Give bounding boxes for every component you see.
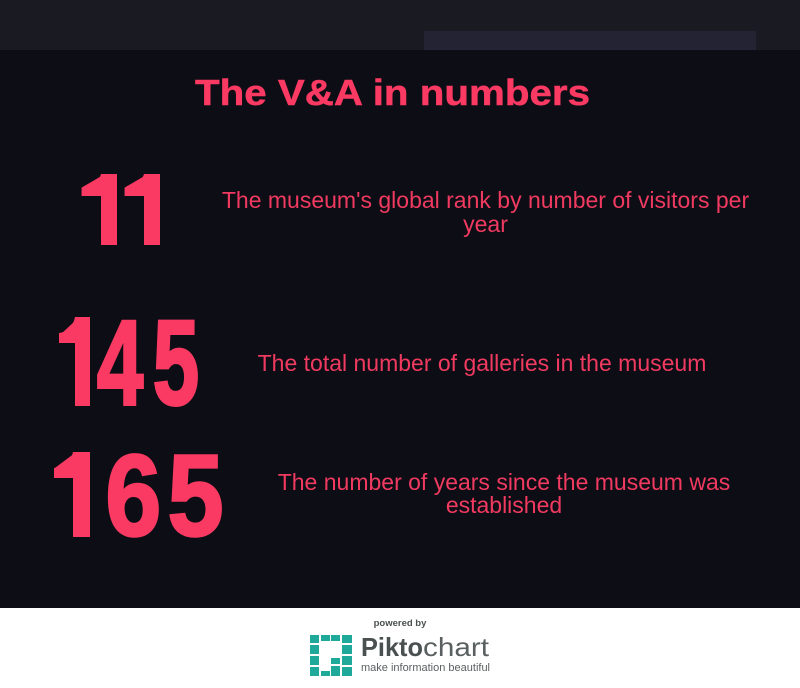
icon: Piktochart logo (310, 635, 352, 676)
logo tagline: make information beautiful (361, 662, 490, 674)
stat: years (44, 432, 730, 561)
stat: galleries (50, 296, 706, 431)
stat: global rank (70, 156, 749, 267)
logo wordmark: Pikto (361, 632, 423, 662)
logo wordmark: chart (423, 632, 490, 662)
number 11: 11 (74, 156, 179, 267)
description: global rank: year (463, 211, 508, 237)
description: galleries: The total number of galleries in the museum (258, 350, 706, 376)
logo wordmark (361, 632, 490, 662)
powered by label: powered by (374, 618, 427, 629)
description: years: The number of years since the museum was (278, 469, 730, 495)
top banner (0, 0, 800, 50)
footer panel (0, 608, 800, 688)
title: The V&A in numbers (195, 72, 590, 113)
description: global rank: The museum's global rank by number of visitors per (222, 187, 749, 213)
number 165: 165 (49, 432, 224, 561)
description: years: established (446, 492, 562, 518)
number 145: 145 (56, 296, 199, 431)
